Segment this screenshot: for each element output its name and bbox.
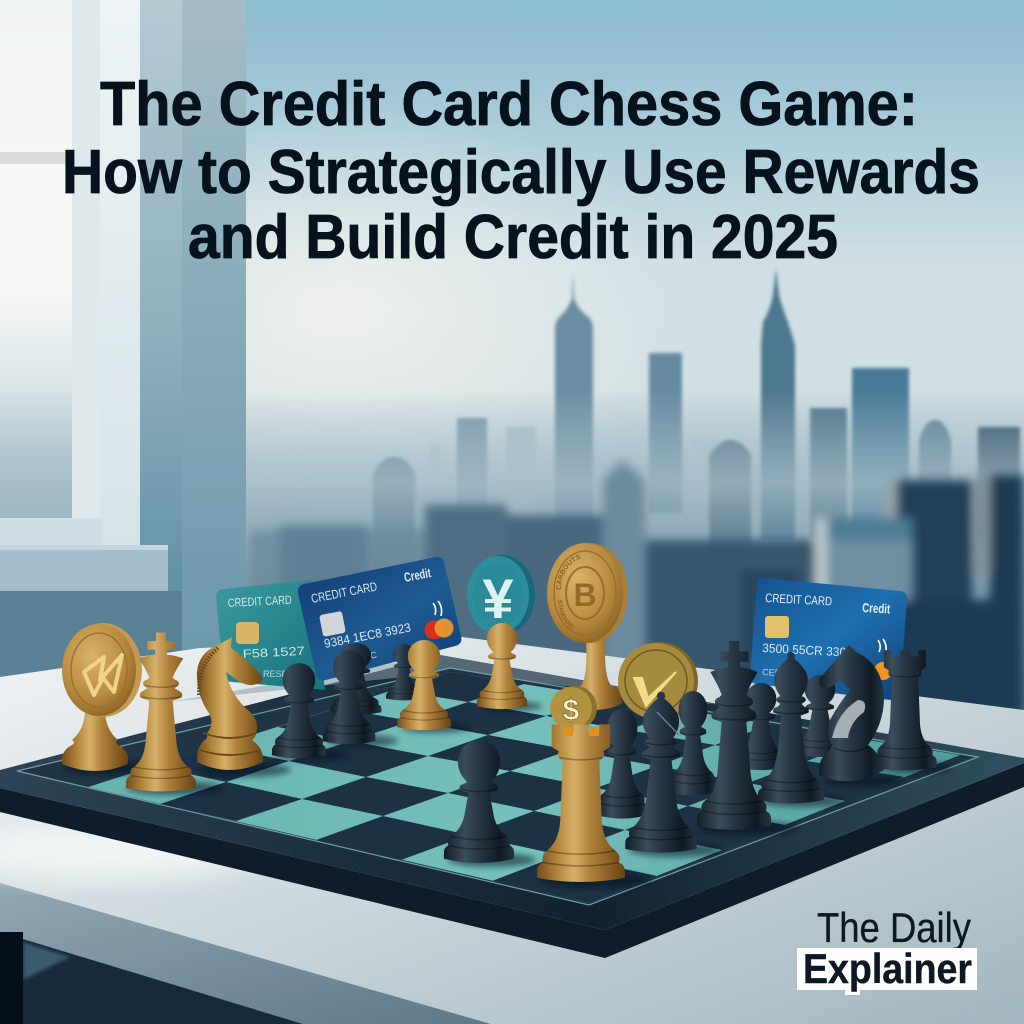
background: blurred city through window (0, 0, 1024, 720)
gold coin piece: bitcoin (547, 543, 628, 710)
dark king (697, 641, 771, 830)
card: navy credit card: CURTIC (342, 650, 378, 666)
board border line (17, 668, 978, 905)
card: blue credit card right: 3500 55CR 330 (762, 641, 846, 659)
dark pawn center front (444, 740, 514, 863)
gold knight (197, 637, 263, 770)
gold coin piece: W (62, 623, 142, 771)
window frame and wall (0, 0, 246, 681)
gold coin piece: bitcoin: STANDARD (558, 600, 574, 628)
card: teal credit card: F58 1527 (242, 644, 305, 661)
title: The Credit Card Chess Game: (100, 70, 918, 139)
dark bishop front (625, 692, 697, 853)
dark squares (153, 672, 904, 903)
dark pawns left group (272, 650, 375, 758)
gold king (126, 633, 196, 791)
logo: The Daily Explainer (797, 904, 977, 995)
logo: The Daily Explainer: The Daily (817, 904, 971, 951)
icon: yen coin (467, 555, 535, 635)
gold dollar coin (550, 686, 597, 730)
light squares (88, 672, 960, 903)
title (62, 70, 980, 272)
chess board (0, 655, 1024, 958)
card: navy credit card: CREDIT CARD (310, 579, 378, 606)
card: teal credit card: RESE (263, 669, 288, 679)
dark bishop right (758, 652, 824, 803)
board top (0, 655, 1024, 930)
gold coin: check mark (618, 642, 698, 720)
back row dark pawns (330, 643, 846, 770)
icon: yen coin: ¥ (482, 567, 514, 630)
card: teal credit card (216, 580, 325, 690)
board side (0, 763, 1024, 958)
piece shadows (64, 701, 951, 888)
dark knight (819, 645, 884, 781)
card: blue credit card right: CREDIT CARD (765, 591, 832, 609)
table front face (0, 883, 491, 1024)
card: navy credit card: 9384 1EC8 3923 (323, 620, 412, 651)
logo: The Daily Explainer: Explainer (803, 945, 972, 992)
dark pawn behind rook (596, 709, 648, 819)
title: and Build Credit in 2025 (188, 203, 838, 272)
gold dollar coin: $ (563, 694, 580, 727)
table (0, 637, 1024, 1024)
card: blue credit card right: CERIU (762, 667, 790, 678)
gold rook (537, 724, 625, 882)
gold coin piece: bitcoin: CARBOUTS (556, 554, 580, 590)
dark pawn tall (669, 691, 717, 796)
card: teal credit card: CREDIT CARD (227, 593, 292, 610)
gold pawns (397, 623, 527, 730)
card: navy credit card: Credit (403, 565, 433, 585)
card: navy credit card (298, 557, 461, 680)
gold coin piece: bitcoin: B (573, 577, 597, 613)
board back reflection (170, 655, 720, 705)
under table shadow (0, 932, 303, 1024)
card: blue credit card right (750, 578, 907, 700)
card: blue credit card right: Credit (862, 600, 891, 616)
dark rook (873, 650, 937, 770)
